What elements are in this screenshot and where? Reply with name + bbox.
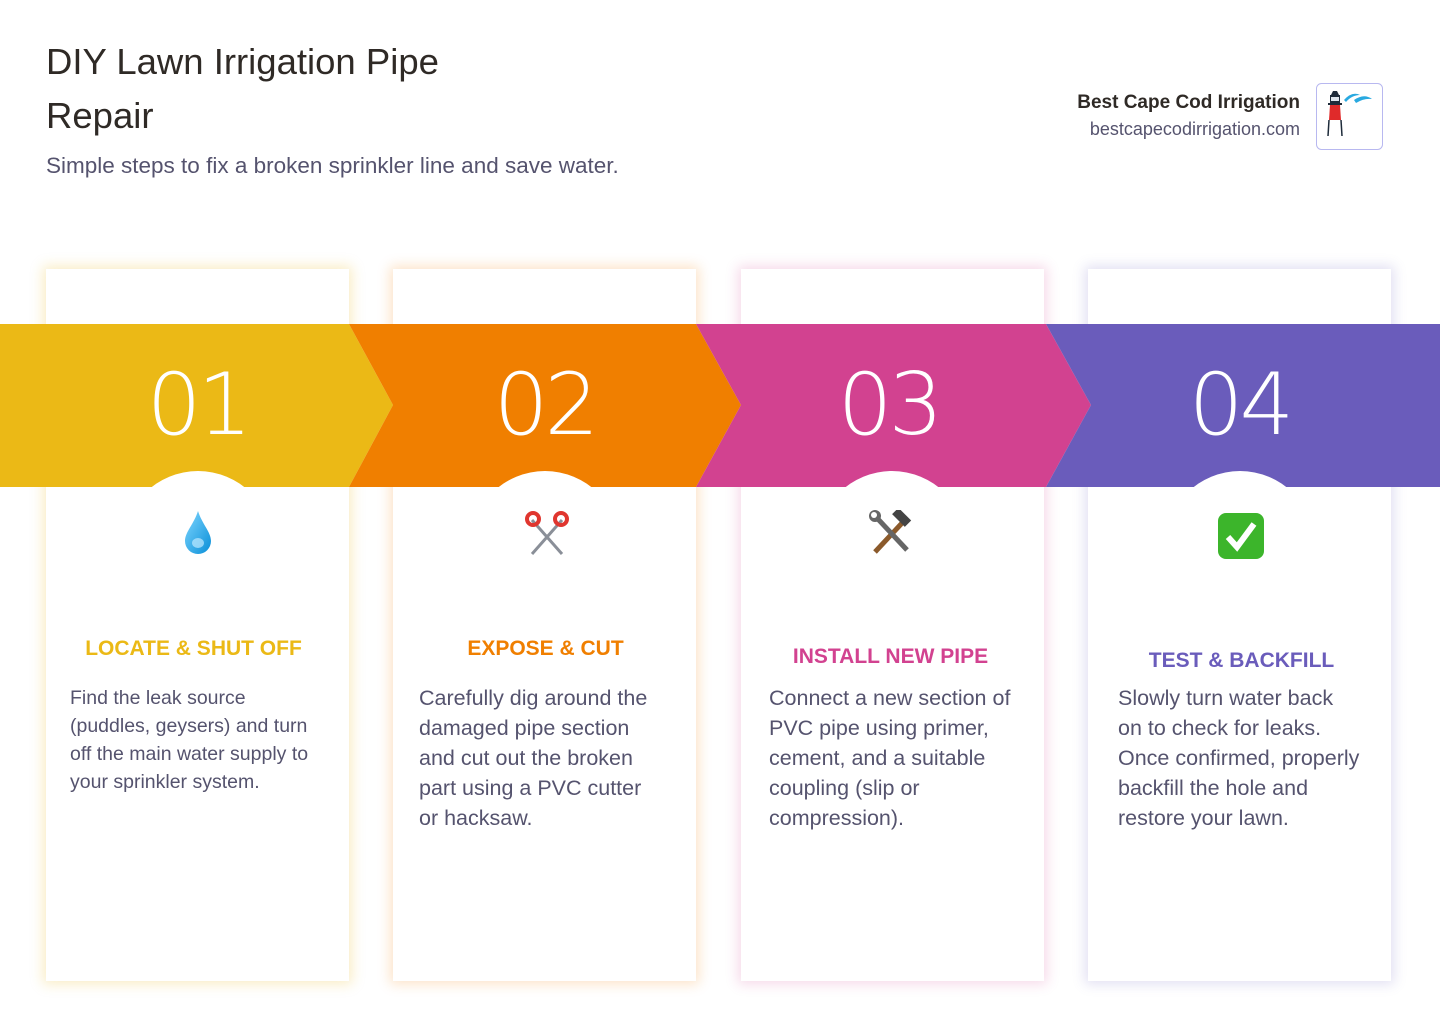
chevron banner: [0, 324, 1440, 487]
step 4 text: on to check for leaks. Once confirmed, properly backfill the hole and restore your lawn.: [1118, 716, 1359, 830]
step 4 text: Slowly turn water back: [1118, 686, 1333, 710]
icon: hammer and wrench: [869, 510, 912, 554]
icon: scissors: [525, 511, 569, 555]
step 2 title: EXPOSE & CUT: [467, 637, 624, 660]
icon circle 4: [1165, 471, 1315, 621]
step 4 title: TEST & BACKFILL: [1149, 649, 1334, 672]
brand block: [1077, 83, 1383, 150]
icon: water drop: [185, 511, 211, 554]
icon circle 2: [470, 471, 620, 621]
card 3: [741, 269, 1044, 981]
brand name: Best Cape Cod Irrigation: [1077, 92, 1300, 113]
icon: check mark box: [1218, 513, 1264, 559]
icon: lighthouse logo: [1316, 83, 1383, 150]
step 2 text: Carefully dig around the damaged pipe section and cut out the broken part using a PVC cutter or hacksaw.: [419, 686, 647, 830]
step 3 title: INSTALL NEW PIPE: [793, 645, 988, 668]
step 3 text: Connect a new section of PVC pipe using primer, cement, and a suitable coupling (slip or compression).: [769, 686, 1010, 830]
title: Repair: [46, 95, 154, 136]
card 2: [393, 269, 696, 981]
icon circle 3: [817, 471, 967, 621]
step 1 text: Find the leak source (puddles, geysers) and turn off the main water supply to your sprinkler system.: [70, 687, 308, 793]
brand url: bestcapecodirrigation.com: [1090, 119, 1300, 139]
number 03: 03: [838, 355, 939, 455]
number 01: 01: [147, 355, 248, 455]
title: DIY Lawn Irrigation Pipe: [46, 41, 439, 82]
step 1 title: LOCATE & SHUT OFF: [85, 637, 302, 660]
card 4: [1088, 269, 1391, 981]
number 02: 02: [494, 355, 595, 455]
title: [46, 41, 439, 136]
icon circle 1: [123, 471, 273, 621]
subtitle: Simple steps to fix a broken sprinkler line and save water.: [46, 153, 619, 178]
number 04: 04: [1189, 355, 1290, 455]
card 1: [46, 269, 349, 981]
